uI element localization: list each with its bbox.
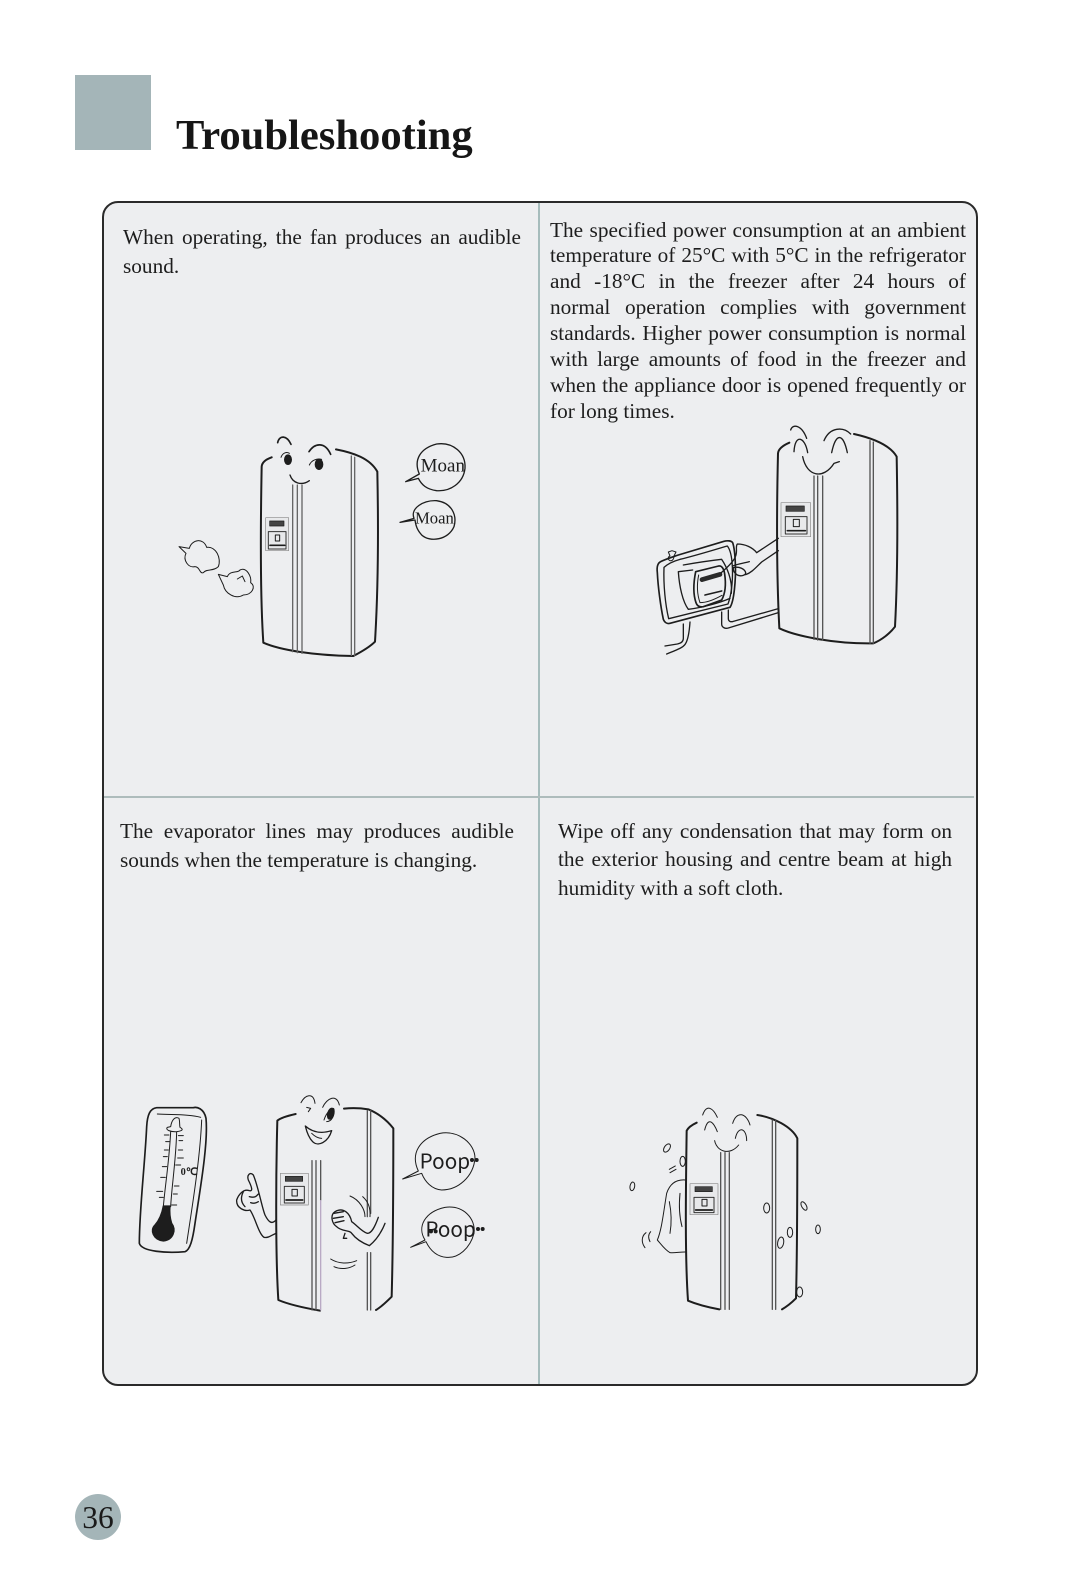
dispenser (690, 1184, 718, 1215)
fridge body (276, 1108, 393, 1311)
water drops (629, 1143, 820, 1297)
text: power consumption: normal operation complies with government (550, 295, 966, 319)
thermometer (139, 1107, 206, 1252)
fridge body (777, 434, 897, 643)
speech bubble: Poop: Poop (420, 1144, 470, 1174)
thermometer: 0℃ (181, 1167, 197, 1178)
divider: horizontal (104, 796, 974, 798)
cloth (642, 1166, 686, 1253)
text: evaporator lines: sounds when the temperature is changing. (120, 848, 477, 872)
pipes (665, 609, 778, 654)
meter dial (694, 566, 725, 607)
face (278, 437, 331, 483)
text: power consumption (550, 218, 966, 423)
divider: vertical (538, 203, 540, 1384)
face (301, 1096, 339, 1144)
text: condensation: humidity with a soft cloth. (558, 876, 783, 900)
text: condensation: Wipe off any condensation that may form on (558, 819, 952, 843)
text: evaporator lines: The evaporator lines may produces audible (120, 819, 514, 843)
text: power consumption: standards. Higher power consumption is normal (550, 321, 966, 345)
hand (721, 538, 778, 576)
dispenser (781, 503, 811, 537)
text: power consumption: with large amounts of food in the freezer and (550, 347, 966, 371)
text: power consumption: when the appliance door is opened frequently or (550, 373, 966, 397)
text: fan sound: sound. (123, 254, 179, 278)
illustration: electricity meter and hand (657, 538, 778, 654)
panel: troubleshooting grid (102, 201, 978, 1386)
dispenser (266, 518, 289, 551)
text: fan sound: When operating, the fan produces an audible (123, 225, 521, 249)
face (703, 1108, 750, 1151)
text: evaporator lines (120, 819, 514, 872)
arm: waving hand (331, 1196, 385, 1268)
text: condensation: the exterior housing and centre beam at high (558, 847, 952, 871)
text: power consumption: temperature of 25°C with 5°C in the refrigerator (550, 243, 966, 267)
text: power consumption: and -18°C in the freezer after 24 hours of (550, 269, 966, 293)
illustration: fridge with condensation (629, 1108, 820, 1309)
text: condensation (558, 819, 952, 900)
illustration: fridge with fan noise (179, 437, 465, 656)
page number (75, 1494, 121, 1540)
speech bubble: Moan (400, 501, 455, 539)
speech bubble: Moan: Moan (415, 508, 455, 527)
page number: 36 (82, 1500, 114, 1535)
text: power consumption: for long times. (550, 399, 675, 423)
dispenser (280, 1173, 308, 1205)
speech bubble: Poop: Poop (425, 1213, 476, 1243)
speech bubble: Poop (403, 1133, 479, 1190)
text: power consumption: The specified power consumption at an ambient (550, 218, 966, 242)
face (791, 426, 851, 474)
speech bubble: Moan: Moan (421, 456, 465, 477)
fridge body (686, 1115, 797, 1309)
meter casing (657, 541, 735, 623)
illustration: fridge with power meter (777, 426, 897, 643)
title: Troubleshooting (176, 112, 473, 159)
arm: pointing hand (237, 1174, 276, 1238)
fridge body (261, 449, 378, 656)
illustration: fridge with thermometer (139, 1096, 485, 1311)
speech bubble: Moan (406, 444, 465, 491)
speech bubble: Poop (411, 1207, 485, 1257)
text: fan sound (123, 225, 521, 278)
header square (75, 75, 151, 150)
puffs of air (179, 541, 253, 597)
